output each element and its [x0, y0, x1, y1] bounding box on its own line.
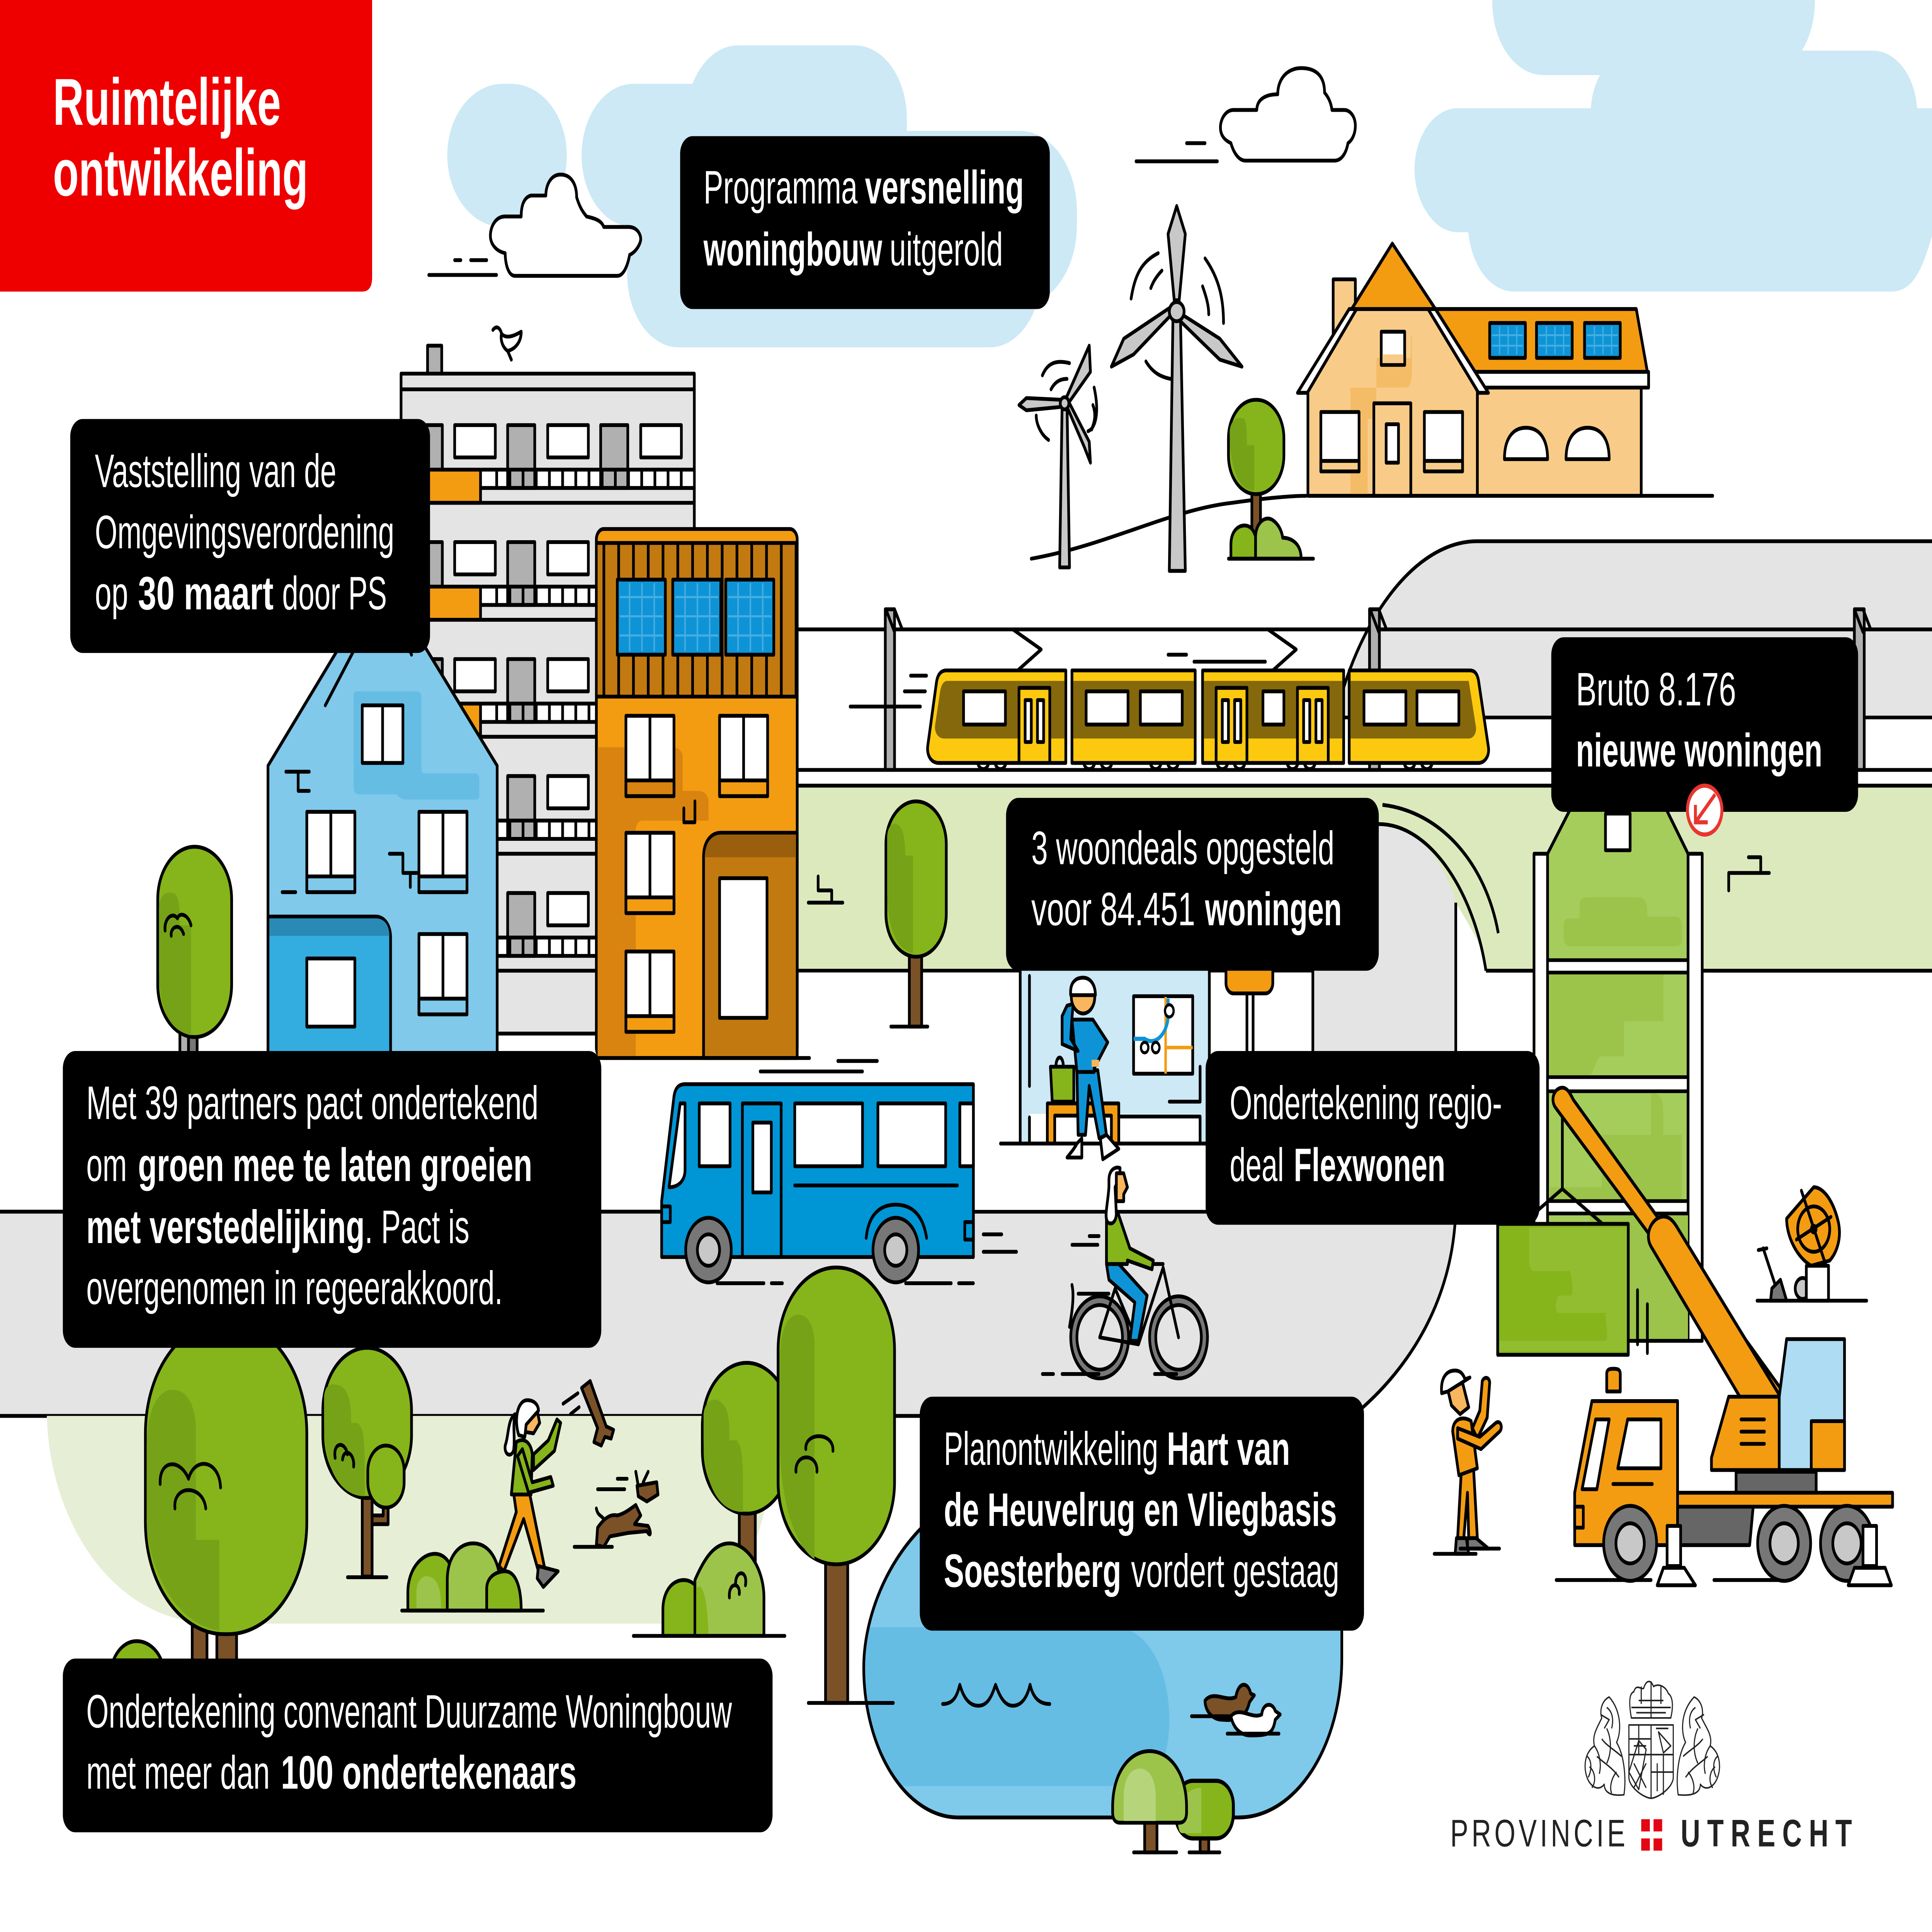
callout: omgevingsverordening: door PS [282, 567, 387, 619]
train [928, 670, 1489, 769]
callout: versnelling woningbouw: woningbouw [703, 223, 883, 276]
cement mixer [1757, 1187, 1867, 1301]
callout: hart van de heuvelrug [920, 1397, 1364, 1631]
title block: Ruimtelijke [53, 65, 281, 139]
callout: groen pact: overgenomen in regeerakkoord. [86, 1262, 503, 1315]
blue house [268, 576, 497, 1058]
background clouds [447, 0, 1932, 347]
tree in park right [702, 1363, 791, 1563]
wind turbine large [1111, 206, 1242, 571]
callout: flexwonen: Flexwonen [1294, 1139, 1445, 1191]
callout: woondeals: 3 woondeals opgesteld [1031, 822, 1334, 874]
person waiting [1062, 978, 1119, 1159]
callout: convenant duurzame woningbouw: met meer dan [86, 1746, 270, 1799]
callout: versnelling woningbouw: uitgerold [889, 223, 1003, 276]
bus [662, 1061, 1017, 1283]
callout: hart van de heuvelrug: Planontwikkeling [944, 1422, 1158, 1475]
cyclist [1043, 1168, 1208, 1378]
tree near viaduct [886, 801, 946, 1027]
small bush behind callout [113, 1641, 162, 1660]
train motion lines [850, 629, 1296, 707]
green marks [808, 857, 1769, 903]
callout: hart van de heuvelrug: Hart van [1167, 1422, 1290, 1475]
callout: omgevingsverordening: 30 maart [138, 567, 274, 619]
callout: woondeals [1006, 798, 1379, 971]
tree in park with sapling [323, 1348, 412, 1577]
tree and shrub by house [1228, 400, 1313, 559]
bus stop shelter [1000, 943, 1273, 1144]
construction building [1534, 791, 1702, 1341]
small tree left [158, 847, 231, 1058]
callout: versnelling woningbouw [680, 136, 1050, 309]
callout: bruto nieuwe woningen: nieuwe woningen [1576, 724, 1822, 777]
outlined cloud left [429, 175, 641, 276]
woman throwing stick [499, 1400, 561, 1587]
tall tree [778, 1267, 895, 1703]
coat of arms [1585, 1681, 1719, 1798]
solar house [1298, 243, 1713, 496]
icon: red location arrow [1687, 786, 1722, 835]
construction worker [1434, 1371, 1501, 1554]
callout: hart van de heuvelrug: de Heuvelrug en Vliegbasis [944, 1483, 1337, 1536]
ducks [1192, 1685, 1280, 1735]
callout: woondeals: voor 84.451 [1031, 883, 1195, 935]
callout: hart van de heuvelrug: vordert gestaag [1131, 1544, 1339, 1597]
hanging green block [1498, 1100, 1647, 1355]
dog [574, 1472, 658, 1547]
callout: bruto nieuwe woningen: Bruto 8.176 [1576, 663, 1736, 716]
callout: woondeals: woningen [1205, 883, 1342, 935]
callout: groen pact: Met 39 partners pact ondertekend [86, 1077, 538, 1129]
apartment building [401, 346, 694, 1034]
tree left large [145, 1321, 307, 1667]
orange building [596, 529, 877, 1061]
callout: versnelling woningbouw: versnelling [865, 161, 1024, 214]
road [0, 805, 1498, 1416]
bench and bag [1047, 1058, 1119, 1144]
callout: flexwonen: deal [1230, 1139, 1284, 1191]
callout: groen pact: met verstedelijking [86, 1201, 365, 1253]
callout: convenant duurzame woningbouw [63, 1658, 772, 1832]
park lawn [47, 1416, 782, 1624]
bushes in park [402, 1543, 543, 1611]
title block [0, 0, 372, 292]
callout: groen pact: . Pact is [365, 1201, 469, 1253]
callout: omgevingsverordening: Omgevingsverordening [95, 506, 394, 558]
callout: groen pact: om [86, 1139, 127, 1191]
crane [1553, 1088, 1893, 1585]
logo wordmark: UTRECHT [1680, 1812, 1852, 1855]
pond trees [1112, 1751, 1233, 1852]
outlined cloud right [1136, 68, 1355, 161]
callout: omgevingsverordening: Vaststelling van de [95, 445, 337, 497]
callout: bruto nieuwe woningen [1551, 637, 1858, 812]
bird [493, 327, 521, 360]
water ripples [942, 1685, 1050, 1706]
callout: groen pact [63, 1051, 601, 1348]
callout: convenant duurzame woningbouw: Ondertekening convenant Duurzame Woningbouw [86, 1685, 732, 1738]
callout: hart van de heuvelrug: Soesterberg [944, 1544, 1121, 1597]
pond [856, 1528, 1342, 1818]
callout: omgevingsverordening [70, 419, 430, 653]
logo wordmark [1450, 1812, 1852, 1855]
callout: flexwonen: Ondertekening regio- [1230, 1077, 1502, 1129]
catenary poles [885, 609, 1871, 770]
callout: flexwonen [1206, 1051, 1539, 1225]
viaduct and railway [798, 541, 1932, 971]
wind turbine small [1019, 346, 1306, 567]
callout: versnelling woningbouw: Programma [704, 161, 858, 214]
stick [563, 1381, 614, 1446]
route map [1134, 996, 1193, 1074]
bush with arcs [633, 1543, 785, 1636]
callout: groen pact: groen mee te laten groeien [138, 1139, 532, 1191]
callout: omgevingsverordening: op [95, 567, 128, 619]
title block: ontwikkeling [53, 136, 308, 210]
callout: convenant duurzame woningbouw: 100 ondertekenaars [281, 1746, 577, 1799]
logo wordmark: PROVINCIE [1450, 1812, 1625, 1855]
